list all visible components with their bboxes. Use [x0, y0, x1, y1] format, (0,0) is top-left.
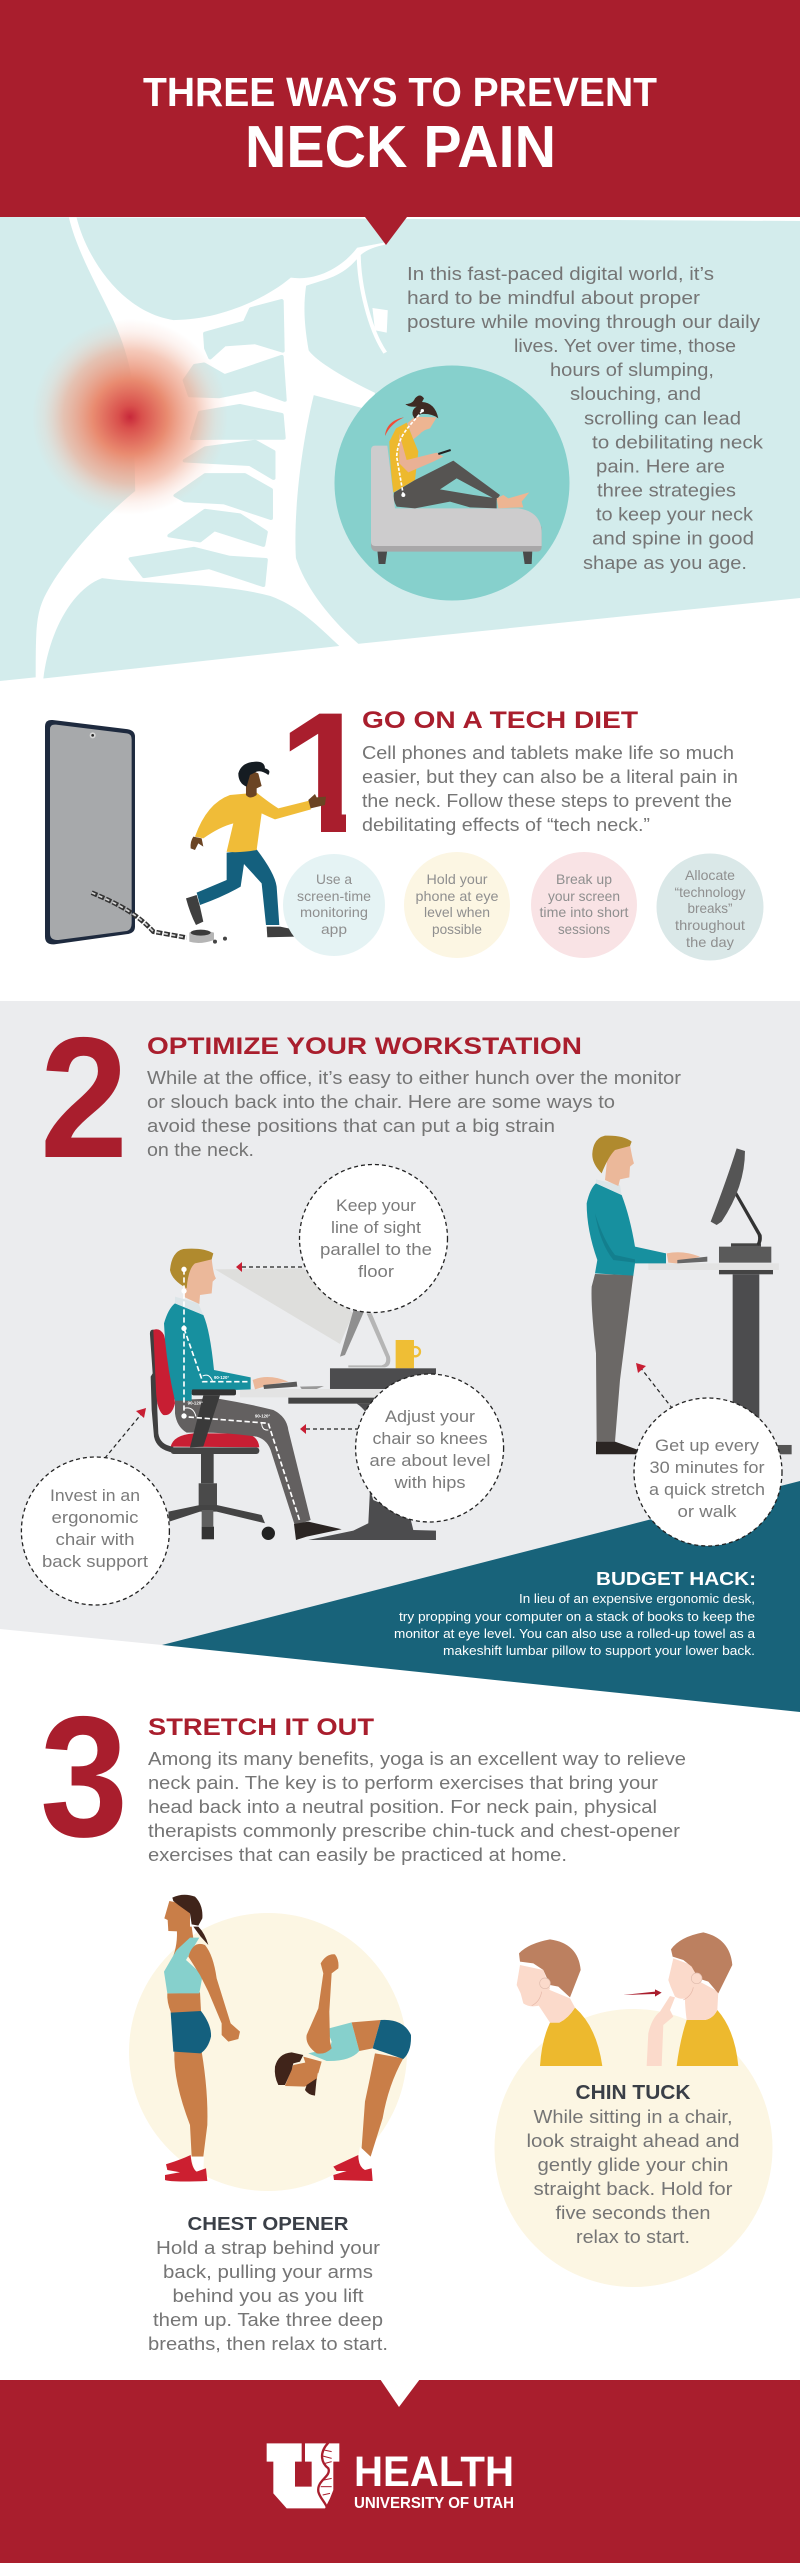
chin tuck text: gently glide your chin [538, 2155, 728, 2175]
callout: chair height: Adjust your [385, 1408, 476, 1426]
tip: screen-time app: screen-time [297, 888, 371, 904]
intro text: pain. Here are [596, 456, 725, 476]
tip: technology breaks: breaks” [688, 900, 733, 916]
body text: therapists commonly prescribe chin-tuck and chest-opener [148, 1821, 680, 1841]
callout: get up [634, 1398, 782, 1546]
budget hack text: try propping your computer on a stack of books to keep the [399, 1609, 755, 1624]
chest opener text: Hold a strap behind your [156, 2238, 380, 2258]
intro text: slouching, and [570, 384, 701, 404]
tip: technology breaks: throughout [675, 917, 745, 933]
tip: short sessions: sessions [558, 921, 610, 937]
logo: HEALTH [354, 2449, 514, 2496]
budget hack text: monitor at eye level. You can also use a rolled-up towel as a [394, 1626, 756, 1641]
chin tuck illustration [494, 1932, 772, 2287]
tip: short sessions: Break up [556, 871, 612, 887]
body text: easier, but they can also be a literal pain in [362, 767, 738, 787]
figure: seated man at desk [150, 1249, 436, 1540]
callout: ergonomic chair [21, 1457, 169, 1605]
figure: seated man at desk: 90-120° [255, 1414, 270, 1419]
arrows [105, 1267, 672, 1458]
tip: short sessions [531, 852, 637, 958]
chest opener text [148, 2213, 388, 2354]
tip: short sessions: time into short [540, 904, 629, 920]
body text: head back into a neutral position. For neck pain, physical [148, 1797, 657, 1817]
panel: section 1 tech diet [45, 711, 764, 960]
chin tuck text: straight back. Hold for [534, 2179, 733, 2199]
callout: chair height: are about level [370, 1452, 490, 1470]
tip: screen-time app: app [321, 921, 347, 937]
teal circle with seated woman [334, 366, 570, 600]
chin tuck text: CHIN TUCK [576, 2082, 691, 2104]
tip: eye level: possible [432, 921, 482, 937]
chest opener illustration [129, 1895, 411, 2191]
callout: get up: 30 minutes for [650, 1459, 765, 1477]
callout: line of sight: floor [358, 1263, 395, 1281]
figure: standing man at desk [587, 1136, 792, 1454]
body text: Among its many benefits, yoga is an excellent way to relieve [148, 1749, 686, 1769]
callout: chair height [356, 1374, 504, 1522]
intro text: three strategies [597, 480, 736, 500]
chin tuck text: relax to start. [576, 2227, 690, 2247]
body text [147, 1068, 681, 1160]
tip: eye level: phone at eye [416, 888, 499, 904]
title [143, 69, 657, 180]
panel: intro [0, 217, 800, 681]
budget hack text: In lieu of an expensive ergonomic desk, [519, 1591, 755, 1606]
callout: line of sight: line of sight [331, 1219, 421, 1237]
callout: get up: or walk [678, 1503, 737, 1521]
heading number 3: 3 [40, 1681, 128, 1873]
header banner [0, 0, 800, 245]
tip: short sessions: your screen [548, 888, 620, 904]
body text: neck pain. The key is to perform exercises that bring your [148, 1773, 658, 1793]
intro text: to debilitating neck [592, 432, 764, 452]
body text: While at the office, it’s easy to either hunch over the monitor [147, 1068, 681, 1088]
callout: ergonomic chair: Invest in an [50, 1487, 140, 1505]
intro text: shape as you age. [583, 553, 747, 573]
callout: ergonomic chair: back support [42, 1553, 148, 1571]
body text: debilitating effects of “tech neck.” [362, 815, 650, 835]
tip: eye level: level when [424, 904, 490, 920]
chest opener text: CHEST OPENER [188, 2213, 348, 2234]
heading: GO ON A TECH DIET [362, 707, 638, 734]
x-ray neck illustration [36, 217, 388, 681]
heading number 1: 1 [278, 677, 374, 869]
logo [267, 2443, 514, 2512]
figure: seated man at desk: 90-120° [188, 1401, 203, 1406]
body text: the neck. Follow these steps to prevent the [362, 791, 732, 811]
callout: chair height: with hips [393, 1474, 466, 1492]
panel: section 3 stretch [40, 1681, 772, 2354]
callout: chair height: chair so knees [372, 1430, 488, 1448]
chest opener text: behind you as you lift [172, 2286, 364, 2306]
panel: section 2 workstation [0, 1001, 800, 1712]
chin tuck text: five seconds then [556, 2203, 710, 2223]
tip: technology breaks: the day [686, 934, 734, 950]
tip: screen-time app [283, 854, 385, 956]
figure: man walking away [186, 762, 326, 937]
body text [148, 1749, 686, 1865]
heading number 2: 2 [40, 1002, 128, 1194]
budget hack text: BUDGET HACK: [596, 1568, 756, 1589]
callout: get up: a quick stretch [649, 1481, 765, 1499]
budget hack text [394, 1568, 756, 1658]
chin tuck text: look straight ahead and [526, 2131, 740, 2151]
figure: seated man at desk: 90-120° [214, 1375, 229, 1380]
tip: technology breaks: Allocate [685, 867, 735, 883]
callout: get up: Get up every [655, 1437, 760, 1455]
chest opener text: breaths, then relax to start. [148, 2334, 388, 2354]
intro text: scrolling can lead [584, 408, 741, 428]
pain glow [32, 319, 228, 515]
callout: line of sight: Keep your [336, 1197, 417, 1215]
body text: avoid these positions that can put a big strain [147, 1116, 555, 1136]
tip: screen-time app: monitoring [300, 904, 368, 920]
tip: technology breaks [656, 854, 764, 960]
title: THREE WAYS TO PREVENT [143, 69, 657, 115]
body text: Cell phones and tablets make life so much [362, 743, 734, 763]
callout: ergonomic chair: ergonomic [52, 1509, 138, 1527]
heading: STRETCH IT OUT [148, 1714, 374, 1741]
chest opener text: them up. Take three deep [153, 2310, 383, 2330]
intro text: hours of slumping, [550, 360, 714, 380]
body text: or slouch back into the chair. Here are some ways to [147, 1092, 615, 1112]
intro text: posture while moving through our daily [407, 312, 760, 332]
intro text: and spine in good [592, 528, 754, 548]
chin tuck text [526, 2082, 740, 2247]
body text: exercises that can easily be practiced at home. [148, 1845, 567, 1865]
body text: on the neck. [147, 1140, 254, 1160]
tip: technology breaks: “technology [674, 884, 746, 900]
callout: line of sight [300, 1164, 448, 1312]
footer banner [0, 2379, 800, 2563]
intro text: to keep your neck [596, 504, 754, 524]
budget hack text: makeshift lumbar pillow to support your lower back. [443, 1643, 755, 1658]
body text [362, 743, 738, 835]
title: NECK PAIN [245, 114, 556, 180]
logo: UNIVERSITY OF UTAH [354, 2495, 514, 2512]
chin tuck text: While sitting in a chair, [534, 2107, 732, 2127]
tip: eye level: Hold your [426, 871, 488, 887]
intro text: In this fast-paced digital world, it’s [407, 264, 714, 284]
heading: OPTIMIZE YOUR WORKSTATION [147, 1033, 582, 1060]
icon: phone with chain [45, 720, 227, 944]
callout: line of sight: parallel to the [320, 1241, 432, 1259]
intro text [407, 264, 764, 573]
chest opener text: back, pulling your arms [163, 2262, 373, 2282]
tip: screen-time app: Use a [316, 871, 352, 887]
callout: ergonomic chair: chair with [56, 1531, 134, 1549]
intro text: hard to be mindful about proper [407, 288, 700, 308]
tip: eye level [404, 852, 510, 958]
arrowheads [136, 1262, 646, 1434]
intro text: lives. Yet over time, those [514, 336, 736, 356]
